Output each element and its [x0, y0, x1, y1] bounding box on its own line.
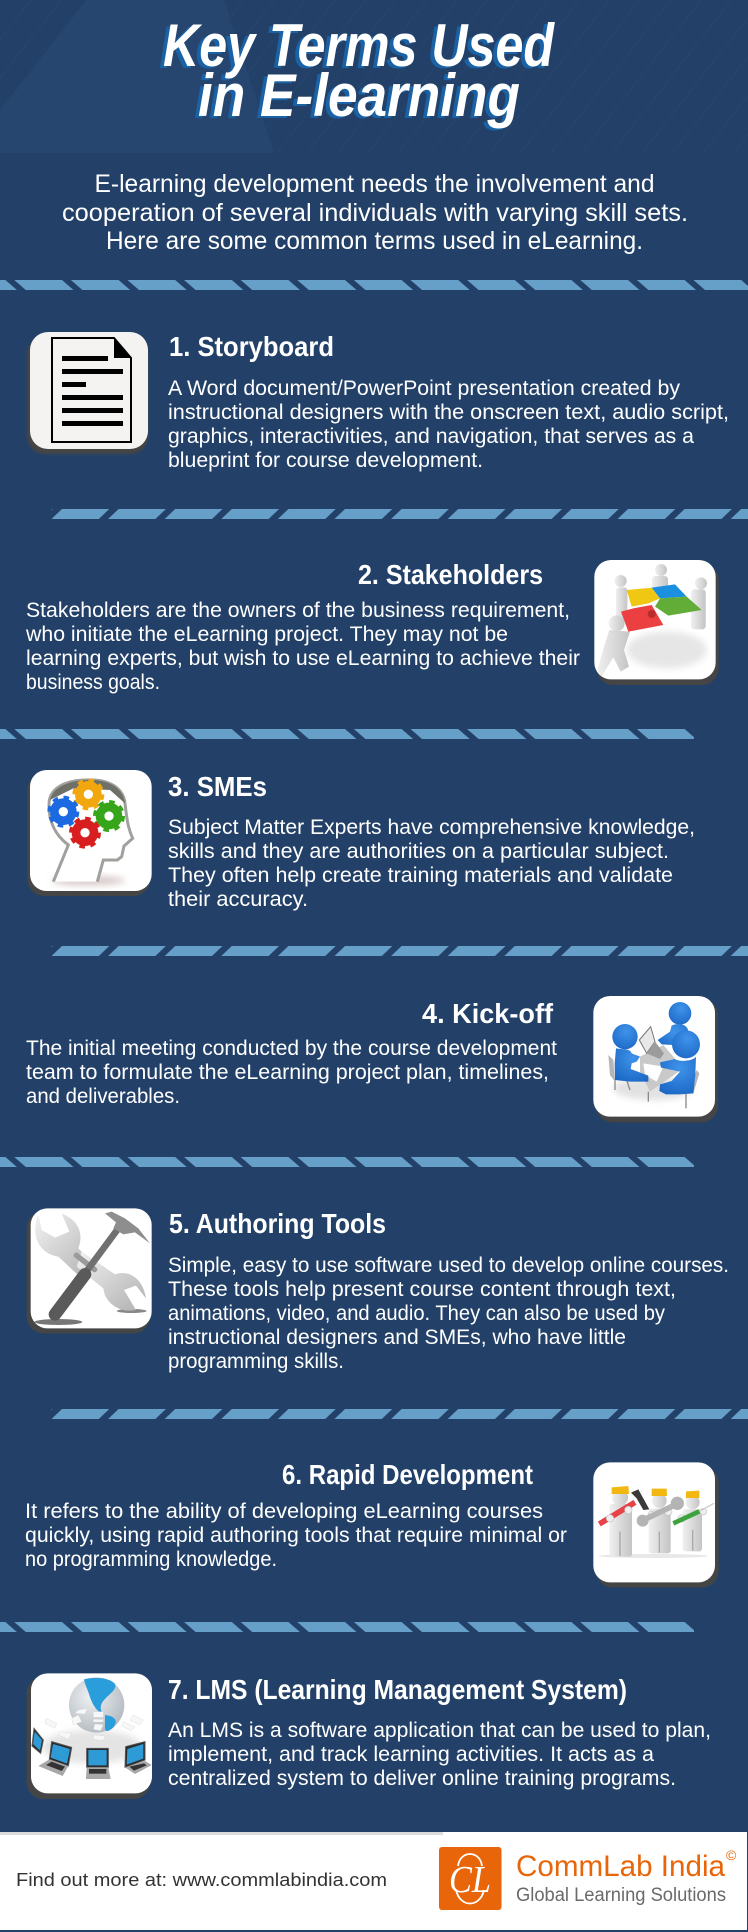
divider 7 [0, 1622, 694, 1632]
panel: storyboard [27, 331, 729, 472]
intro text [62, 170, 688, 255]
text: storyboard definition: A Word document/PowerPoint presentation created by [168, 377, 680, 400]
divider 3 [0, 729, 694, 739]
text: storyboard definition: blueprint for course development. [168, 449, 483, 472]
text: authoring tools definition: programming skills. [168, 1350, 344, 1373]
text: kick-off definition: and deliverables. [26, 1085, 180, 1108]
text: kick-off definition [26, 1037, 557, 1108]
icon: meeting [593, 996, 718, 1122]
text: authoring tools definition: These tools help present course content through text, [168, 1278, 676, 1301]
icon: puzzle team [594, 560, 719, 685]
text: stakeholders definition: learning experts, but wish to use eLearning to achieve their [26, 647, 580, 670]
text: storyboard definition: graphics, interactivities, and navigation, that serves as a [168, 425, 694, 448]
text: kick-off definition: team to formulate the eLearning project plan, timelines, [26, 1061, 549, 1084]
divider 2 [52, 509, 748, 519]
text: smes definition: skills and they are authorities on a particular subject. [168, 840, 669, 863]
text: lms definition [168, 1719, 711, 1790]
divider 6 [52, 1409, 748, 1419]
heading: rapid development: 6. Rapid Development [282, 1459, 533, 1490]
panel: stakeholders [25, 559, 719, 694]
title: in E-learning [194, 64, 516, 131]
text: authoring tools definition [168, 1254, 729, 1373]
title [159, 12, 555, 131]
heading: storyboard: 1. Storyboard [169, 331, 334, 362]
title: in E-learning [198, 62, 520, 129]
panel: smes [27, 770, 695, 911]
logo: CommLab India: Global Learning Solutions [516, 1885, 726, 1906]
logo: CommLab India: © [726, 1847, 737, 1863]
text: authoring tools definition: instructional designers and SMEs, who have little [168, 1326, 626, 1349]
panel: authoring tools [27, 1208, 729, 1373]
intro text: E-learning development needs the involvement and [94, 170, 654, 198]
text: stakeholders definition: who initiate the eLearning project. They may not be [25, 623, 508, 646]
text: rapid development definition [25, 1500, 567, 1571]
intro text: cooperation of several individuals with varying skill sets. [62, 199, 688, 227]
text: rapid development definition: It refers to the ability of developing eLearning courses [25, 1500, 543, 1523]
icon: globe and laptops [27, 1673, 152, 1799]
heading: smes: 3. SMEs [168, 771, 267, 802]
intro text: Here are some common terms used in eLearning. [106, 227, 643, 255]
panel: lms [27, 1673, 711, 1799]
heading: authoring tools: 5. Authoring Tools [169, 1208, 386, 1239]
text: stakeholders definition: business goals. [26, 671, 160, 694]
title: Key Terms Used [159, 14, 551, 81]
text: smes definition: Subject Matter Experts have comprehensive knowledge, [168, 816, 695, 839]
text: rapid development definition: no programming knowledge. [25, 1548, 277, 1571]
text: stakeholders definition: Stakeholders are the owners of the business requirement, [26, 599, 570, 622]
text: authoring tools definition: animations, video, and audio. They can also be used by [168, 1302, 665, 1325]
footer [0, 1832, 747, 1930]
text: rapid development definition: quickly, using rapid authoring tools that require minimal or [25, 1524, 567, 1547]
icon: head with gears [27, 770, 152, 896]
text: lms definition: centralized system to deliver online training programs. [168, 1767, 676, 1790]
icon: builders [593, 1462, 719, 1587]
text: smes definition: their accuracy. [168, 888, 308, 911]
panel: rapid development [25, 1459, 719, 1587]
text: lms definition: implement, and track learning activities. It acts as a [168, 1743, 654, 1766]
header band [0, 0, 748, 153]
text: storyboard definition: instructional designers with the onscreen text, audio script, [168, 401, 729, 424]
divider 5 [0, 1157, 694, 1167]
text: storyboard definition [168, 377, 729, 472]
logo: CommLab India [439, 1847, 737, 1910]
logo: CommLab India: CL [449, 1859, 491, 1901]
icon: document [27, 332, 148, 454]
icon: wrench and hammer [27, 1208, 152, 1333]
heading: kick-off: 4. Kick-off [422, 998, 554, 1029]
text: kick-off definition: The initial meeting conducted by the course development [26, 1037, 557, 1060]
logo: CommLab India: CommLab India [516, 1850, 725, 1883]
text: lms definition: An LMS is a software application that can be used to plan, [168, 1719, 711, 1742]
text: authoring tools definition: Simple, easy to use software used to develop online courses. [168, 1254, 729, 1277]
panel: kick-off [26, 996, 718, 1122]
divider 1 [0, 280, 748, 290]
heading: stakeholders: 2. Stakeholders [358, 559, 543, 590]
divider 4 [52, 946, 748, 956]
footer link text: Find out more at: www.commlabindia.com [16, 1870, 387, 1890]
text: stakeholders definition [25, 599, 580, 694]
text: smes definition: They often help create training materials and validate [168, 864, 673, 887]
title: Key Terms Used [163, 12, 555, 79]
heading: lms: 7. LMS (Learning Management System) [168, 1674, 627, 1705]
text: smes definition [168, 816, 695, 911]
